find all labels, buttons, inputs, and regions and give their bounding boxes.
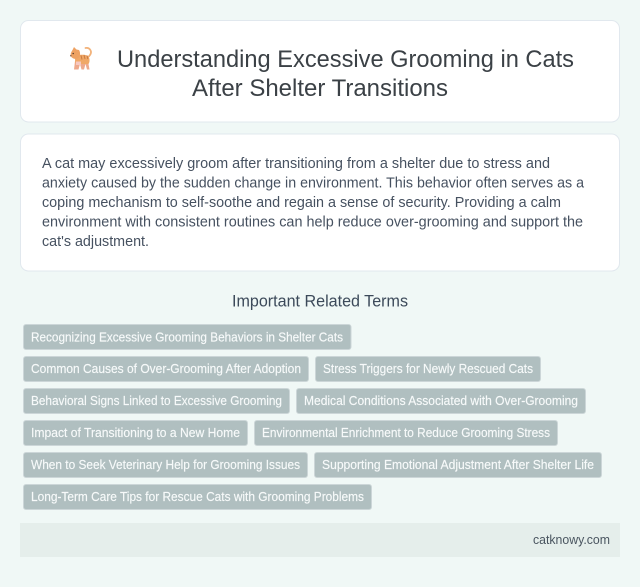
tag	[24, 388, 290, 414]
panel: title header	[20, 20, 620, 122]
title text	[117, 46, 574, 102]
tag	[24, 484, 372, 510]
panel: description	[20, 134, 620, 271]
panel: related term tags	[24, 324, 602, 510]
tag: Supporting Emotional Adjustment After Shelter Life	[322, 458, 594, 472]
description text: coping mechanism to self-soothe and regain a sense of security. Providing a calm	[42, 195, 561, 211]
tag: Behavioral Signs Linked to Excessive Grooming	[31, 394, 282, 408]
title text: Understanding Excessive Grooming in Cats	[117, 46, 574, 73]
tag	[314, 452, 602, 478]
tag: Long-Term Care Tips for Rescue Cats with Grooming Problems	[31, 490, 364, 504]
tag	[254, 420, 558, 446]
title text: After Shelter Transitions	[192, 75, 448, 102]
icon: cat	[70, 47, 91, 70]
heading: related terms: Important Related Terms	[232, 292, 408, 310]
tag	[24, 420, 248, 446]
tag: Stress Triggers for Newly Rescued Cats	[323, 362, 533, 376]
tag: When to Seek Veterinary Help for Grooming Issues	[31, 458, 300, 472]
tag: Impact of Transitioning to a New Home	[31, 426, 240, 440]
description text: cat's adjustment.	[42, 234, 149, 250]
description text: anxiety caused by the sudden change in environment. This behavior often serves as a	[42, 176, 585, 192]
tag: Recognizing Excessive Grooming Behaviors in Shelter Cats	[31, 330, 343, 344]
description text: A cat may excessively groom after transitioning from a shelter due to stress and	[42, 156, 550, 172]
tag	[316, 356, 540, 382]
description text: environment with consistent routines can help reduce over-grooming and support the	[42, 214, 583, 230]
tag	[296, 388, 586, 414]
tag: Environmental Enrichment to Reduce Grooming Stress	[262, 426, 550, 440]
tag	[24, 324, 351, 350]
tag	[24, 356, 308, 382]
tag: Medical Conditions Associated with Over-Grooming	[304, 394, 578, 408]
footer	[20, 523, 620, 557]
footer site name: catknowy.com	[533, 532, 610, 547]
tag: Common Causes of Over-Grooming After Adoption	[31, 362, 301, 376]
description text	[42, 156, 585, 250]
tag	[24, 452, 308, 478]
